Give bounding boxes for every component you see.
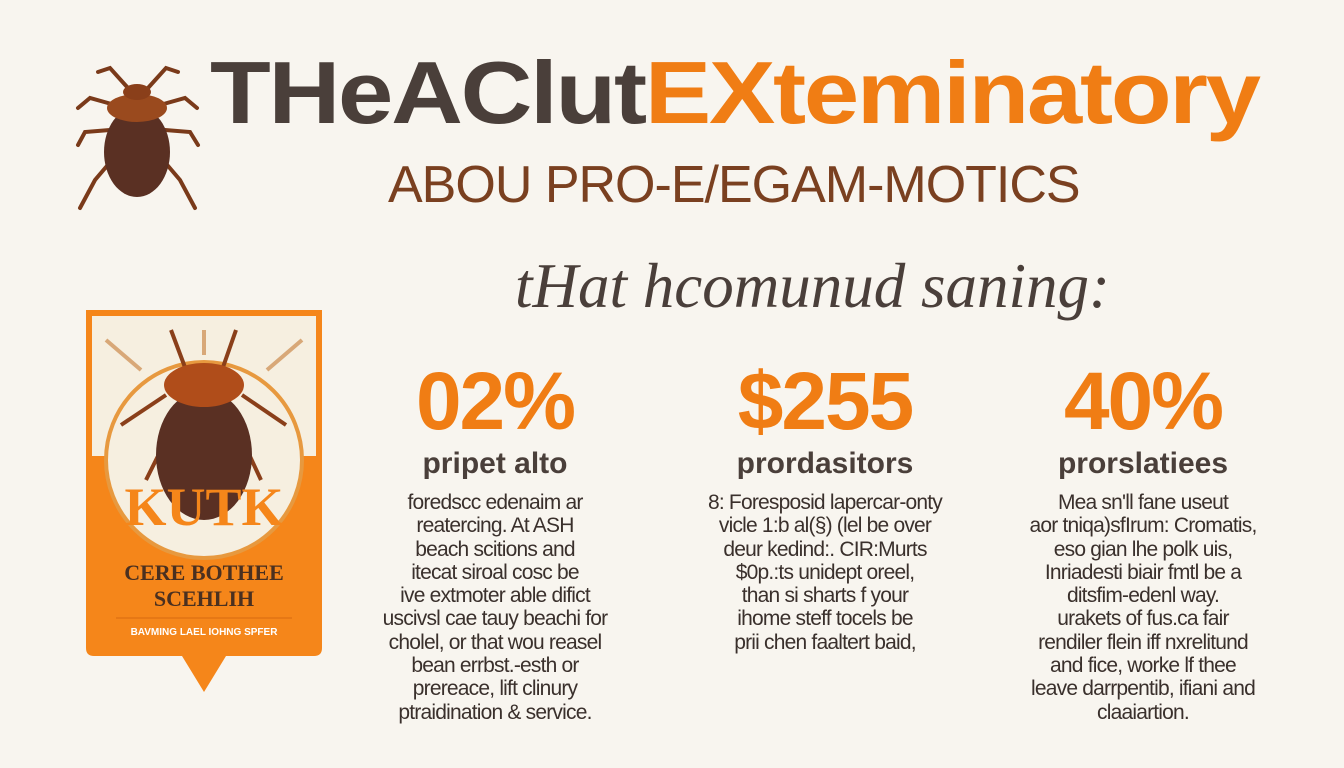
stat 3: leave darrpentib, ifiani and [1031,677,1255,700]
stat 2: deur kedind:. CIR:Murts [723,538,927,561]
icon: bug top-left [76,66,200,210]
stat 3: rendiler flein iff nxrelitund [1038,631,1248,654]
stat 2: vicle 1:b al(§) (lel be over [719,514,931,537]
panel: badge: KUTK [124,477,284,537]
stat 2 [708,356,943,654]
stat 1: ive extmoter able difict [400,584,590,607]
stat 1: ptraidination & service. [398,701,592,724]
stat 1: pripet alto [422,447,568,480]
panel: badge: CERE BOTHEE [124,560,284,585]
stat 1: itecat siroal cosc be [411,561,579,584]
subtitle: ABOU PRO-E/EGAM-MOTICS [388,156,1080,214]
stat 3: aor tniqa)sfIrum: Cromatis, [1030,514,1256,537]
stat 1: prereace, lift clinury [413,677,577,700]
handwritten heading: tHat hcomunud saning: [515,251,1110,321]
stat 3: urakets of fus.ca fair [1057,607,1229,630]
stat 1: bean errbst.-esth or [411,654,579,677]
stat 3: ditsfim-edenl way. [1067,584,1219,607]
stat 1: cholel, or that wou reasel [389,631,601,654]
stat 3: Inriadesti biair fmtl be a [1045,561,1241,584]
stat 2: ihome steff tocels be [737,607,913,630]
panel: badge: BAVMING LAEL IOHNG SPFER [131,627,278,638]
stat 3 [1030,356,1256,724]
stat 2: than si sharts f your [742,584,908,607]
stat 2: $255 [738,356,912,447]
panel: badge: SCEHLIH [154,586,254,611]
stat 2: 8: Foresposid lapercar-onty [708,491,942,514]
stat 1: uscivsl cae tauy beachi for [383,607,607,630]
stat 1: beach scitions and [415,538,575,561]
stat 3: claaiartion. [1097,701,1189,724]
stat 1: reatercing. At ASH [416,514,574,537]
stat 3: and fice, worke lf thee [1050,654,1236,677]
stat 2: $0p.:ts unidept oreel, [736,561,914,584]
stat 3: eso gian lhe polk uis, [1054,538,1232,561]
stat 3: Mea sn'll fane useut [1058,491,1228,514]
stat 2: prii chen faaltert baid, [734,631,916,654]
stat 2: prordasitors [737,447,913,480]
stat 3: prorslatiees [1058,447,1228,480]
stat 1 [383,356,608,724]
stat 1: 02% [416,356,574,447]
panel: badge [86,310,322,692]
title: THeAClutEXteminatory [210,43,1259,142]
stat 3: 40% [1064,356,1222,447]
stat 1: foredscc edenaim ar [407,491,583,514]
